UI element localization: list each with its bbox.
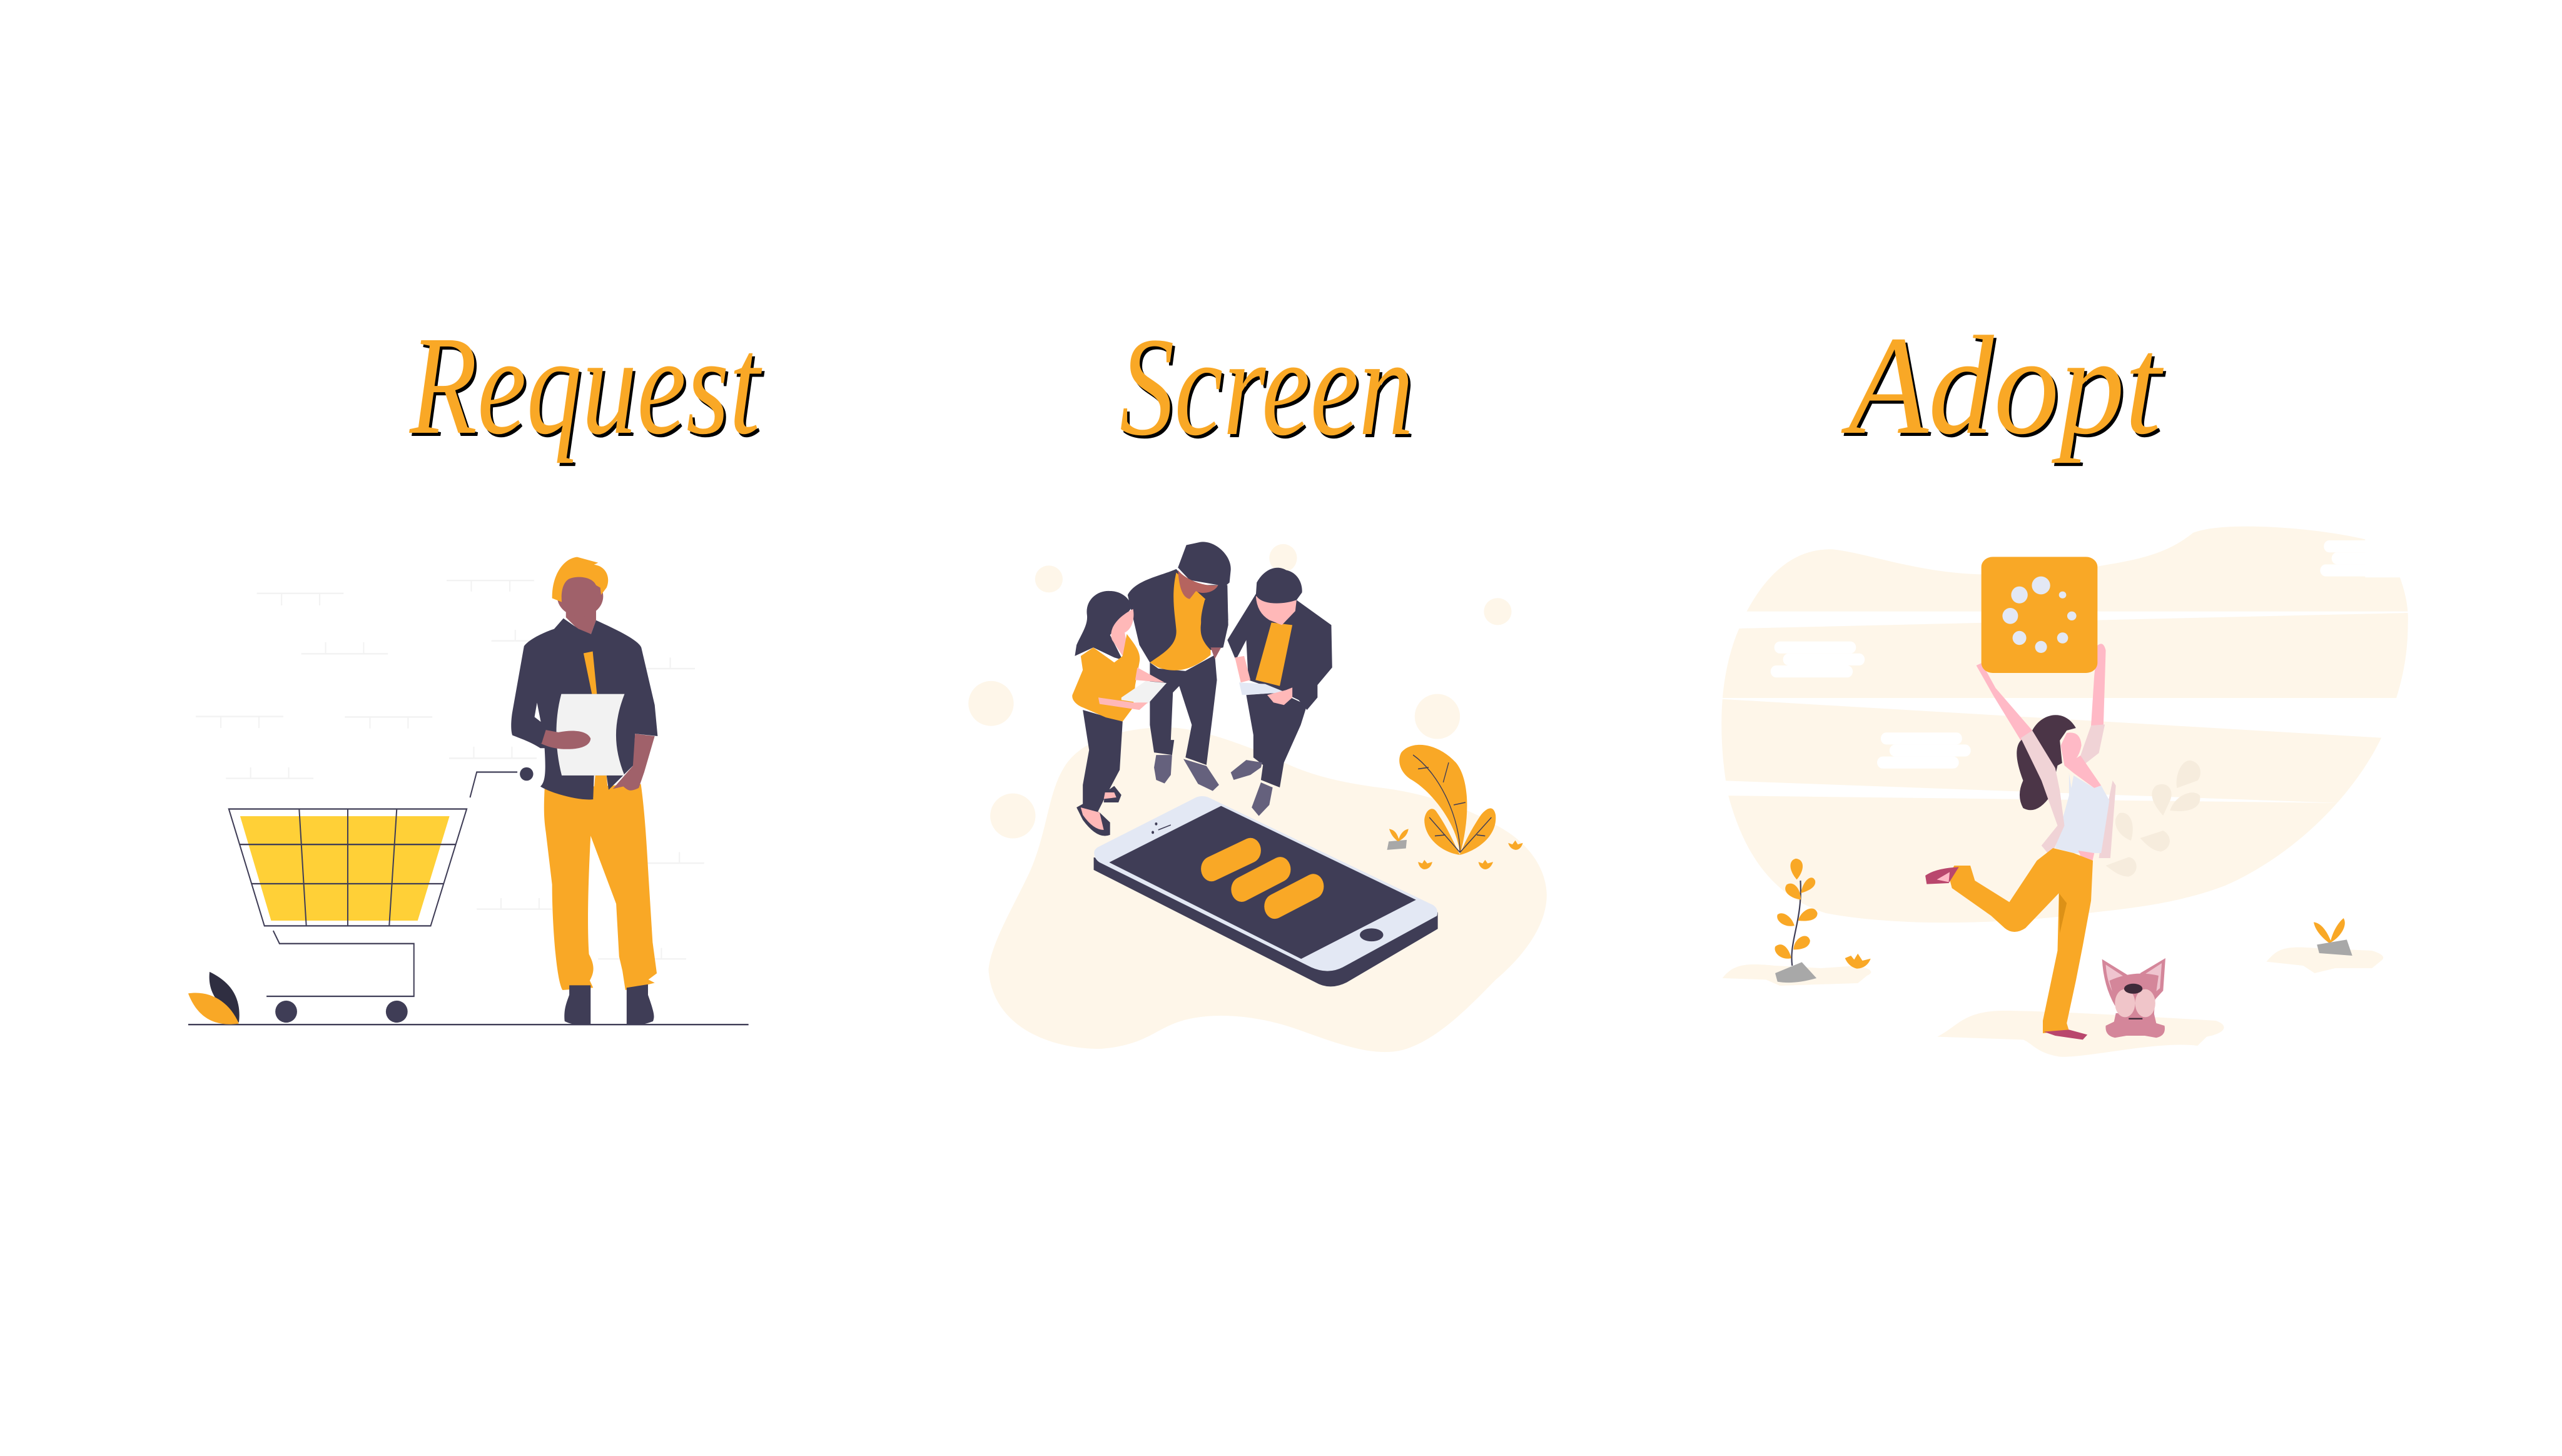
floating circles: [968, 544, 1512, 839]
title: Request: Request: [408, 307, 762, 463]
right rock with sprout: [2314, 918, 2352, 956]
man in the middle: [1128, 542, 1231, 791]
panel: screen illustration: [968, 542, 1547, 1052]
small flower: [1845, 954, 1871, 969]
pink dog: [2102, 958, 2165, 1038]
shopping cart: [229, 767, 534, 1023]
woman lifting a card: [1925, 644, 2116, 1039]
rock with sprout: [1387, 829, 1409, 850]
title: Adopt: Adopt: [1841, 307, 2164, 463]
panel: adopt illustration: [1720, 527, 2427, 1057]
man on the right: [1227, 568, 1332, 816]
background blob with stripes and clouds: [1720, 527, 2427, 923]
icon: leaves: [188, 972, 240, 1024]
brick wall background: [196, 580, 704, 959]
title: Screen: Screen: [1120, 308, 1414, 465]
man holding a list: [511, 557, 657, 1025]
ground line: [188, 1024, 749, 1026]
ground patches: [1723, 948, 2383, 1057]
woman on the left: [1072, 591, 1167, 836]
background blob: [988, 727, 1547, 1052]
left plant with rock: [1775, 859, 1818, 983]
faded background plant: [2106, 761, 2200, 877]
loading card: [1982, 557, 2097, 673]
panel: request illustration: [188, 557, 749, 1025]
small flowers: [1418, 841, 1523, 869]
plant with three leaves: [1399, 745, 1496, 855]
phone: [1094, 796, 1438, 986]
